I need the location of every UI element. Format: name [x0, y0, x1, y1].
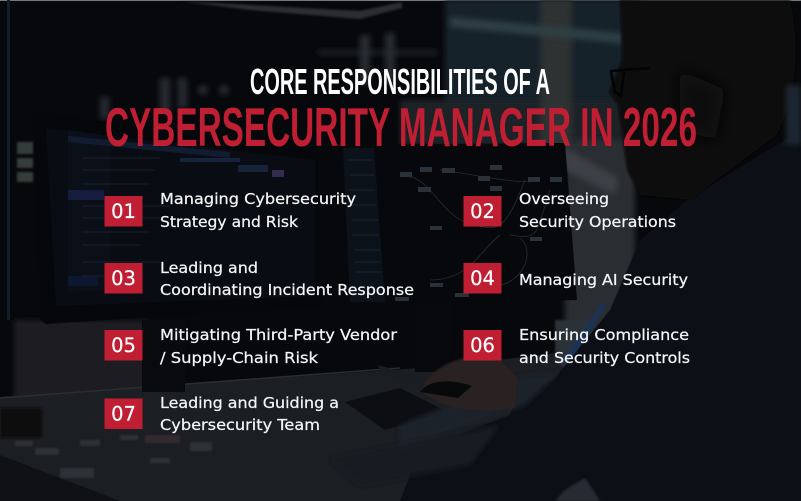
item 07 — [104, 394, 339, 434]
item 02: Security Operations — [519, 213, 676, 231]
desk — [0, 345, 620, 501]
item 06: and Security Controls — [519, 349, 690, 367]
item 06: Ensuring Compliance — [519, 326, 689, 344]
person: head — [609, 0, 796, 200]
item 02 — [464, 190, 676, 231]
right monitor — [322, 143, 577, 306]
item 05 — [104, 326, 398, 367]
item 07: 07 — [111, 402, 136, 426]
item 02: Overseeing — [519, 190, 609, 208]
item 05: / Supply-Chain Risk — [160, 349, 318, 367]
title line 1: CORE RESPONSIBILITIES OF A — [250, 61, 550, 102]
item 04: Managing AI Security — [519, 271, 688, 289]
left monitor — [33, 112, 322, 324]
hand — [420, 357, 517, 410]
item 06 — [464, 326, 690, 367]
blurred office window — [445, 0, 640, 150]
item 06: 06 — [470, 334, 495, 357]
keyboard and hand — [345, 388, 448, 430]
item 03: 03 — [111, 267, 136, 290]
person: shirt — [400, 130, 801, 501]
item 03: Coordinating Incident Response — [160, 281, 414, 299]
item 01 — [104, 190, 356, 231]
item 05: Mitigating Third-Party Vendor — [160, 326, 398, 344]
item 05: 05 — [111, 334, 136, 357]
item 07: Leading and Guiding a — [160, 394, 339, 412]
item 01: 01 — [111, 200, 136, 223]
item 04 — [464, 263, 688, 294]
item 04: 04 — [470, 267, 495, 290]
item 01: Strategy and Risk — [160, 213, 298, 231]
item 03: Leading and — [160, 259, 258, 277]
item 03 — [104, 259, 414, 299]
monitor stands — [142, 320, 185, 392]
item 02: 02 — [470, 200, 495, 223]
pens holder — [555, 302, 606, 368]
item 01: Managing Cybersecurity — [160, 190, 356, 208]
title — [105, 61, 697, 158]
ceiling light band — [180, 1, 402, 19]
item 07: Cybersecurity Team — [160, 416, 320, 434]
